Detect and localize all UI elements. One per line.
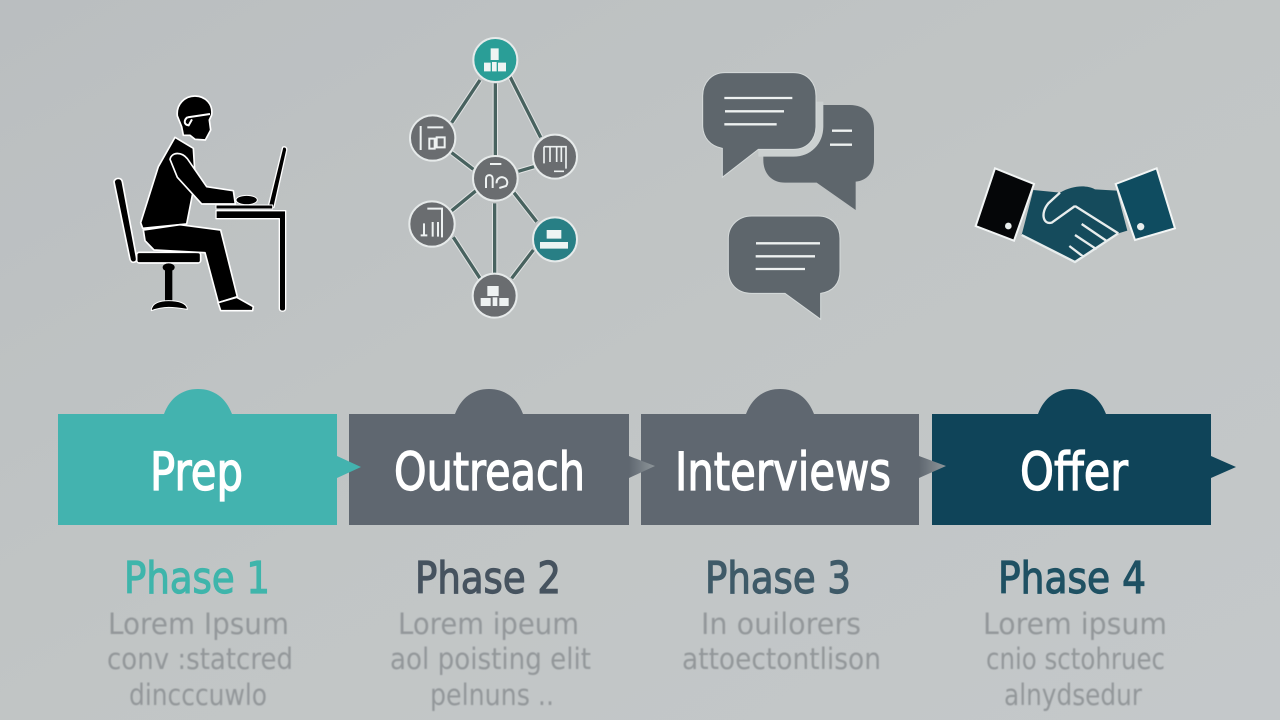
text block: phase 1 description [107, 607, 293, 712]
icon: person working at laptop [114, 96, 287, 311]
node: right [533, 135, 577, 179]
text block: phase 4 description: cnio sctohruec [986, 642, 1165, 676]
text block: phase 1 description: Lorem Ipsum [108, 607, 289, 641]
node: lower right teal [533, 217, 577, 261]
text block: phase 4 description: Lorem ipsum [983, 607, 1167, 641]
text block: phase 3 description: attoectontlison [682, 642, 881, 676]
text block: phase 2 description: aol poisting elit [390, 642, 591, 676]
bubble: front left [703, 73, 816, 177]
node: lower left [409, 201, 455, 247]
arrow: Interviews to Offer [919, 456, 946, 478]
arrow: Outreach to Interviews [629, 456, 655, 478]
right cuff [1116, 168, 1175, 240]
heading: Phase 2: Phase 2 [415, 553, 561, 604]
arrow: Offer end [1211, 456, 1236, 478]
node: centre [473, 156, 518, 201]
arrow: Prep to Outreach [337, 456, 361, 478]
text block: phase 2 description: pelnuns .. [430, 678, 554, 712]
heading: Phase 4: Phase 4 [998, 553, 1146, 604]
icon: speech bubbles [703, 73, 874, 319]
step: Prep [58, 389, 337, 525]
step: Offer [932, 389, 1211, 525]
text block: phase 1 description: dincccuwlo [129, 678, 267, 712]
left cuff [976, 168, 1034, 241]
icon: handshake [976, 168, 1175, 262]
text block: phase 2 description: Lorem ipeum [398, 607, 579, 641]
step: Interviews: Interviews [675, 442, 891, 503]
node: bottom [473, 274, 517, 318]
bubble: bottom [728, 216, 840, 319]
text block: phase 4 description: alnydsedur [1004, 678, 1142, 712]
heading: Phase 1: Phase 1 [124, 553, 270, 604]
text block: phase 3 description [682, 607, 881, 676]
text block: phase 3 description: In ouilorers [701, 607, 861, 641]
bubble: back right [763, 105, 874, 210]
node: upper left [410, 115, 455, 161]
icon: network of connected nodes [409, 38, 577, 318]
step: Prep: Prep [150, 442, 243, 503]
text block: phase 4 description [983, 607, 1167, 712]
node: top teal [473, 38, 517, 82]
text block: phase 2 description [390, 607, 591, 712]
heading: Phase 3: Phase 3 [705, 553, 851, 604]
step: Interviews [641, 389, 919, 525]
step: Outreach [349, 389, 629, 525]
text block: phase 1 description: conv :statcred [107, 642, 293, 676]
step: Offer: Offer [1020, 442, 1128, 503]
step: Outreach: Outreach [394, 442, 585, 503]
